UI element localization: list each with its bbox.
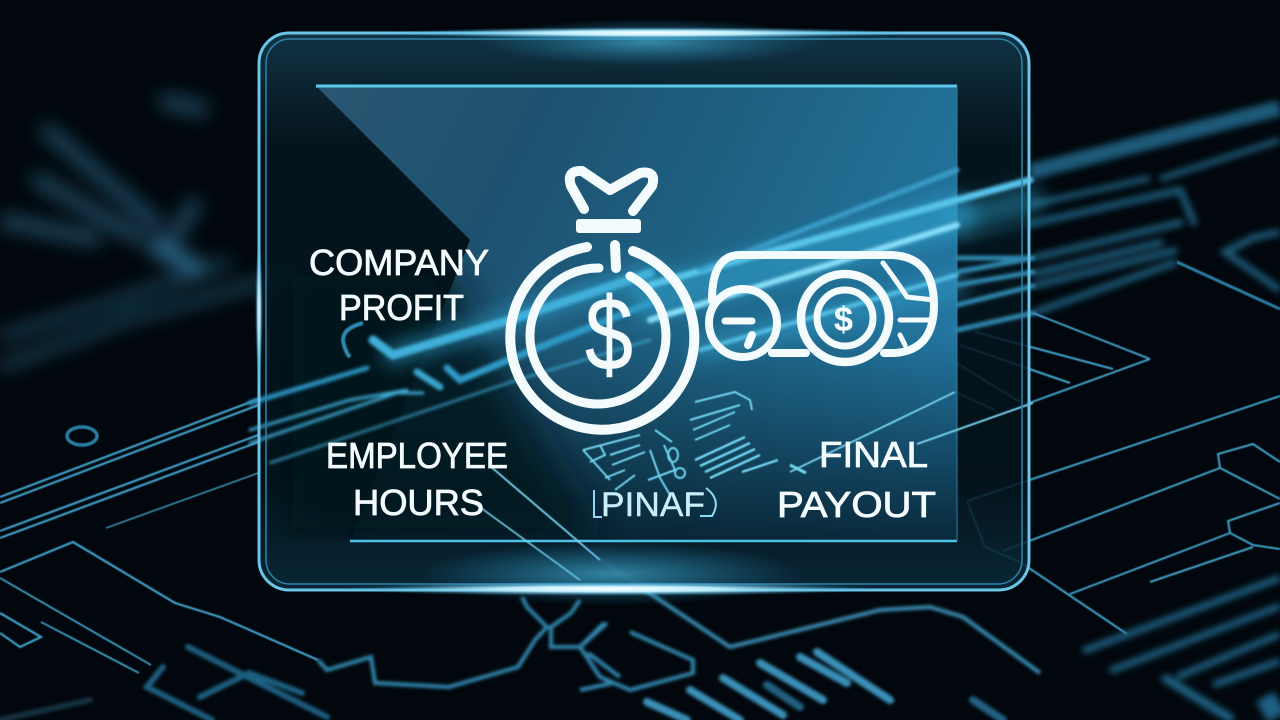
small chip graphic: [583, 392, 806, 495]
soft glow behind streaks: [393, 200, 1030, 355]
glass fill: [258, 33, 1030, 590]
label: company profit: [309, 242, 489, 328]
panel: glass card: [250, 18, 1033, 606]
label: final payout: FINAL: [819, 434, 928, 475]
blurred circuit traces, top right: [960, 108, 1280, 313]
blurred bars, bottom: [0, 647, 1003, 720]
label: pinaf chip text: PINAF: [601, 486, 705, 524]
frame: double rounded border: [259, 33, 1029, 590]
left edge glow: [255, 240, 263, 380]
blurred circuit traces, bottom right: [1083, 578, 1280, 720]
icon: banknote with coins: [709, 255, 934, 362]
blurred circuit traces, top left: [0, 100, 307, 367]
sharp circuit lines, left: [0, 398, 318, 673]
bottom edge glow: [340, 542, 880, 606]
icon: money bag: [510, 171, 694, 430]
sharp trace, upper right: [1177, 262, 1280, 309]
circuit, bottom left and centre: [318, 560, 1040, 690]
panel: inner blue display: [280, 86, 957, 541]
label: employee hours: HOURS: [353, 482, 484, 523]
label: final payout: PAYOUT: [777, 484, 936, 525]
label: employee hours: EMPLOYEE: [326, 435, 508, 476]
dollar sign: $: [585, 277, 633, 393]
label: company profit: PROFIT: [339, 287, 464, 328]
small dollar sign: $: [834, 301, 853, 339]
light streaks through panel: [250, 170, 1033, 463]
circuit lines on panel: [470, 392, 1033, 580]
top edge glow: [390, 18, 910, 66]
label: final payout: [777, 434, 936, 525]
arc trace on panel: [343, 323, 363, 357]
label: company profit: COMPANY: [309, 242, 489, 283]
sharp circuit lines, right: [900, 313, 1280, 634]
label: employee hours: [326, 435, 508, 523]
